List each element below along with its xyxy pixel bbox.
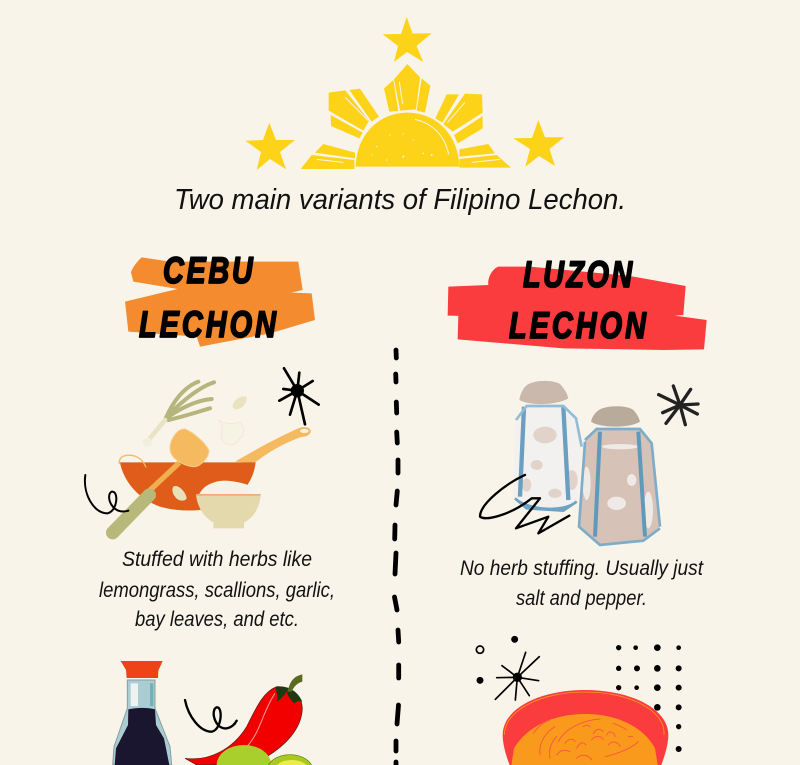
icon: black scribble xyxy=(480,475,569,533)
icon: top star xyxy=(383,17,432,62)
text: Cebu stuffing description: Stuffed with herbs like xyxy=(122,548,312,571)
icon: garlic clove xyxy=(172,486,187,501)
panel: Cebu heading: LECHON xyxy=(139,305,277,346)
icon: black curl xyxy=(185,700,237,732)
icon: chili pepper and limes xyxy=(185,674,313,765)
icon: black splat xyxy=(476,637,539,700)
center dashed divider xyxy=(394,350,399,765)
text: Luzon stuffing description: No herb stuffing. Usually just xyxy=(460,557,704,580)
text: Luzon stuffing description: salt and pepper. xyxy=(516,587,647,610)
icon: red sauce bowl with splat and dots xyxy=(476,637,682,765)
icon: right star xyxy=(513,120,564,167)
icon: garlic xyxy=(218,396,247,445)
icon: black splat xyxy=(279,368,319,424)
text: Cebu stuffing description: lemongrass, scallions, garlic, xyxy=(99,579,335,602)
icon: chili xyxy=(185,674,302,765)
icon: black asterisk xyxy=(659,386,698,425)
text: Cebu stuffing description xyxy=(99,548,335,631)
text: Cebu stuffing description: bay leaves, and etc. xyxy=(135,608,299,631)
panel: Cebu heading: CEBU xyxy=(163,251,254,292)
icon: Philippine sun and three stars xyxy=(245,17,564,170)
icon: left star xyxy=(245,123,295,170)
panel: Luzon heading: LUZON xyxy=(523,255,633,296)
icon: salt and pepper shakers xyxy=(480,381,698,545)
icon: dot grid xyxy=(616,644,682,752)
text: Luzon stuffing description xyxy=(460,557,704,610)
icon: sun with rays xyxy=(301,64,511,169)
icon: black squiggle xyxy=(85,475,128,513)
icon: spatula xyxy=(113,429,209,533)
icon: lime xyxy=(217,745,271,765)
icon: pan handle xyxy=(235,427,311,463)
icon: lime slice xyxy=(267,755,313,765)
icon: bowl xyxy=(503,690,668,765)
icon: salt shaker xyxy=(513,381,582,511)
icon: pepper shaker xyxy=(578,406,660,545)
icon: wok bowl xyxy=(120,462,256,510)
icon: rice bowl xyxy=(196,481,261,528)
panel: Luzon heading xyxy=(448,255,707,350)
icon: scallion xyxy=(143,382,214,447)
icon: wok with herbs and rice xyxy=(85,368,319,533)
panel: Cebu heading xyxy=(125,251,315,347)
icon: soy sauce bottle xyxy=(113,661,172,765)
panel: Luzon heading: LECHON xyxy=(509,306,647,347)
title: Two main variants of Filipino Lechon. xyxy=(174,184,626,216)
